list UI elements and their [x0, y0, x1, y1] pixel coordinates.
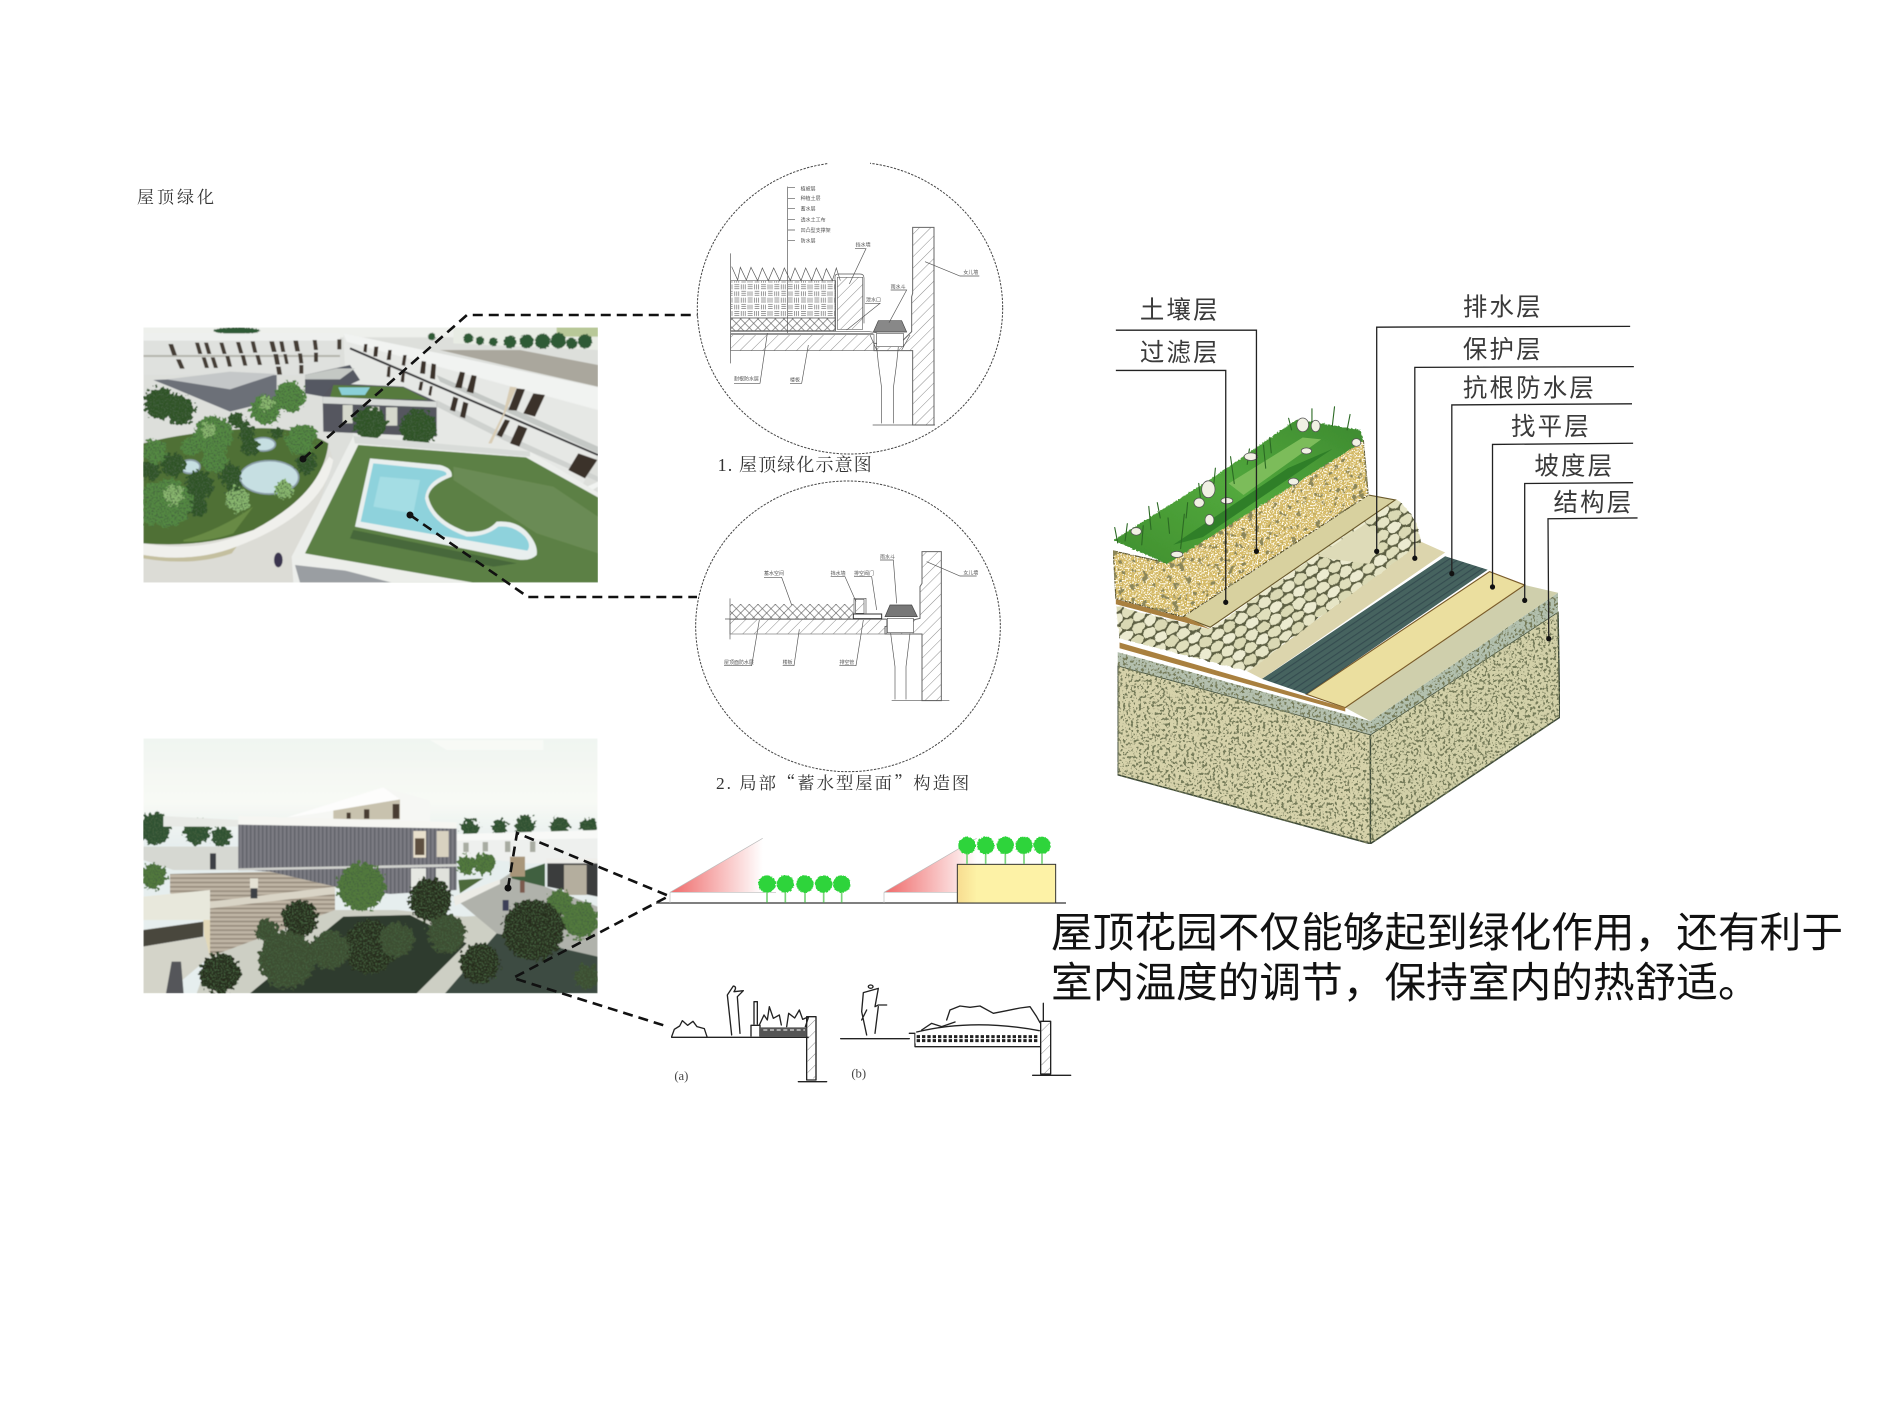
raised planter	[957, 864, 1056, 903]
infographic canvas	[138, 162, 1841, 1083]
CAD drawing 1: 雨水斗	[891, 283, 906, 290]
structure layer faces	[1118, 612, 1560, 844]
CAD drawing 1: 挡水墙	[856, 242, 871, 249]
CAD drawing 2: 排空阀门	[854, 570, 874, 577]
CAD drawing 1	[731, 186, 979, 425]
CAD drawing 2: 挡水墙	[831, 570, 846, 577]
CAD drawing 1: 女儿墙	[963, 269, 978, 276]
CAD drawing 1: 透水土工布	[801, 216, 826, 223]
CAD drawing 2: 排空管	[839, 659, 854, 666]
layer labels: 找平层	[1511, 412, 1591, 441]
sketch a	[672, 986, 827, 1082]
CAD drawing 1: 凹凸型支撑架	[801, 227, 831, 234]
waterproof layer	[1262, 556, 1488, 694]
brown membrane	[1120, 643, 1345, 711]
slope layer	[1345, 585, 1558, 721]
leveling layer	[1306, 572, 1525, 708]
CAD drawing 1: 种植土层	[801, 195, 821, 202]
CAD drawing 1: 耐根防水层	[734, 376, 759, 383]
filter layer	[1183, 495, 1395, 627]
sight triangle right	[884, 838, 990, 903]
leader anchor dots	[300, 456, 512, 892]
description text: 屋顶花园不仅能够起到绿化作用，还有利于	[1051, 909, 1843, 956]
title: 屋顶绿化	[137, 188, 217, 207]
layer labels: 结构层	[1554, 489, 1633, 517]
CAD drawing 2: 雨水斗	[880, 553, 895, 560]
CAD drawing 1: 植被层	[801, 186, 816, 193]
CAD drawing 1: 防水层	[801, 238, 816, 245]
label b: (b)	[851, 1066, 866, 1080]
panel: sight-line diagrams	[656, 837, 1071, 1083]
panel: section detail 1	[697, 158, 1003, 475]
panel: roof layer cutaway	[1113, 293, 1638, 844]
caption 2: 2. 局部“蓄水型屋面”构造图	[716, 769, 971, 794]
caption 1: 1. 屋顶绿化示意图	[718, 455, 873, 475]
CAD drawing 1: 蓄水层	[801, 206, 816, 213]
photo: building exterior with roof terrace	[139, 738, 599, 994]
drainage gravel	[1116, 499, 1421, 671]
sketch b	[841, 985, 1071, 1075]
layer labels: 土壤层	[1140, 296, 1220, 325]
layer labels: 抗根防水层	[1463, 374, 1596, 403]
layer labels: 坡度层	[1534, 452, 1614, 481]
dashed circle 1	[697, 162, 1003, 454]
layer labels: 保护层	[1463, 335, 1543, 364]
dashed leader lines	[303, 315, 698, 1027]
ground lines	[656, 901, 1066, 905]
panel: section detail 2	[696, 481, 1000, 794]
grass layer	[1113, 407, 1363, 564]
CAD drawing 2: 蓄水空间	[764, 570, 784, 577]
CAD drawing 1: 楼板	[790, 377, 800, 384]
soil layer	[1113, 440, 1368, 617]
trees on roof	[958, 837, 1051, 864]
dashed circle 2	[696, 481, 1000, 772]
CAD drawing 1: 泄水口	[866, 297, 881, 304]
gravel inner clearing	[1318, 524, 1382, 564]
CAD drawing 2	[724, 552, 978, 701]
label a: (a)	[674, 1069, 688, 1083]
CAD drawing 2: 女儿墙	[963, 569, 978, 576]
layer labels: 排水层	[1463, 293, 1543, 322]
slope band	[1118, 593, 1558, 734]
leader lines	[1116, 326, 1638, 641]
description text: 室内温度的调节，保持室内的热舒适。	[1051, 959, 1760, 1006]
trees left	[758, 875, 850, 903]
layer labels	[1140, 293, 1633, 517]
circle gap	[828, 158, 870, 164]
sight triangle left	[670, 838, 776, 903]
CAD drawing 2: 屋顶面防水层	[724, 659, 754, 666]
description text	[1051, 909, 1843, 1006]
protection layer	[1247, 542, 1445, 679]
CAD drawing 2: 楼板	[783, 659, 793, 666]
photo: aerial view of roof garden with pool	[140, 327, 598, 583]
layer labels: 过滤层	[1140, 338, 1220, 367]
